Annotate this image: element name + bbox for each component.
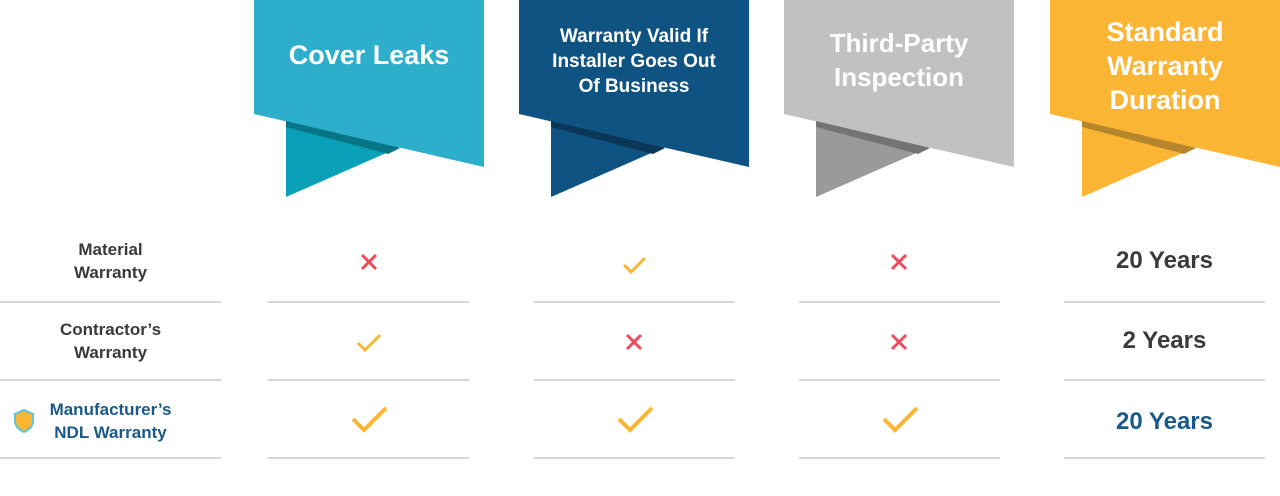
heading: Cover Leaks: Cover Leaks: [289, 40, 449, 70]
dividers: [0, 301, 221, 303]
row label: Contractor's Warranty: [60, 320, 161, 362]
banner: Standard Duration: [1050, 0, 1280, 197]
icon: shield: [14, 408, 34, 434]
heading: Third-Party Inspection: Third-Party: [830, 28, 968, 58]
heading: Warranty Valid If Installer Goes Out Of Business: Installer Goes Out: [552, 51, 716, 72]
row label: Material Warranty: Warranty: [74, 263, 147, 282]
row label: Contractor's Warranty: Contractor’s: [60, 320, 161, 339]
header banners: [254, 0, 1280, 197]
row label: Manufacturer's NDL Warranty: Manufacturer’s: [50, 400, 171, 419]
row label: Manufacturer's NDL Warranty: [50, 400, 171, 442]
duration: 2 Years: 2 Years: [1123, 327, 1206, 354]
row3 marks: [353, 408, 917, 430]
heading: Warranty Valid If Installer Goes Out Of Business: [552, 26, 716, 97]
row label: Manufacturer's NDL Warranty: NDL Warranty: [54, 423, 167, 442]
banner: Cover Leaks: [254, 0, 484, 197]
row1 marks: [362, 255, 906, 272]
duration: 20 Years NDL: 20 Years: [1116, 408, 1213, 435]
heading: Standard Warranty Duration: Duration: [1110, 85, 1220, 115]
heading: Standard Warranty Duration: [1106, 17, 1224, 115]
heading: Standard Warranty Duration: Warranty: [1107, 51, 1223, 81]
duration: 20 Years: 20 Years: [1116, 247, 1213, 274]
heading: Warranty Valid If Installer Goes Out Of Business: Of Business: [579, 76, 689, 97]
banner: Warranty Valid: [519, 0, 749, 197]
row label: Material Warranty: Material: [78, 240, 143, 259]
heading: Third-Party Inspection: Inspection: [834, 62, 964, 92]
heading: Third-Party Inspection: [830, 28, 968, 92]
banner: Third-Party: [784, 0, 1014, 197]
row label: Contractor's Warranty: Warranty: [74, 343, 147, 362]
row2 marks: [358, 335, 906, 350]
heading: Standard Warranty Duration: Standard: [1106, 17, 1224, 47]
row label: Material Warranty: [74, 240, 147, 282]
heading: Warranty Valid If Installer Goes Out Of Business: Warranty Valid If: [560, 26, 708, 47]
